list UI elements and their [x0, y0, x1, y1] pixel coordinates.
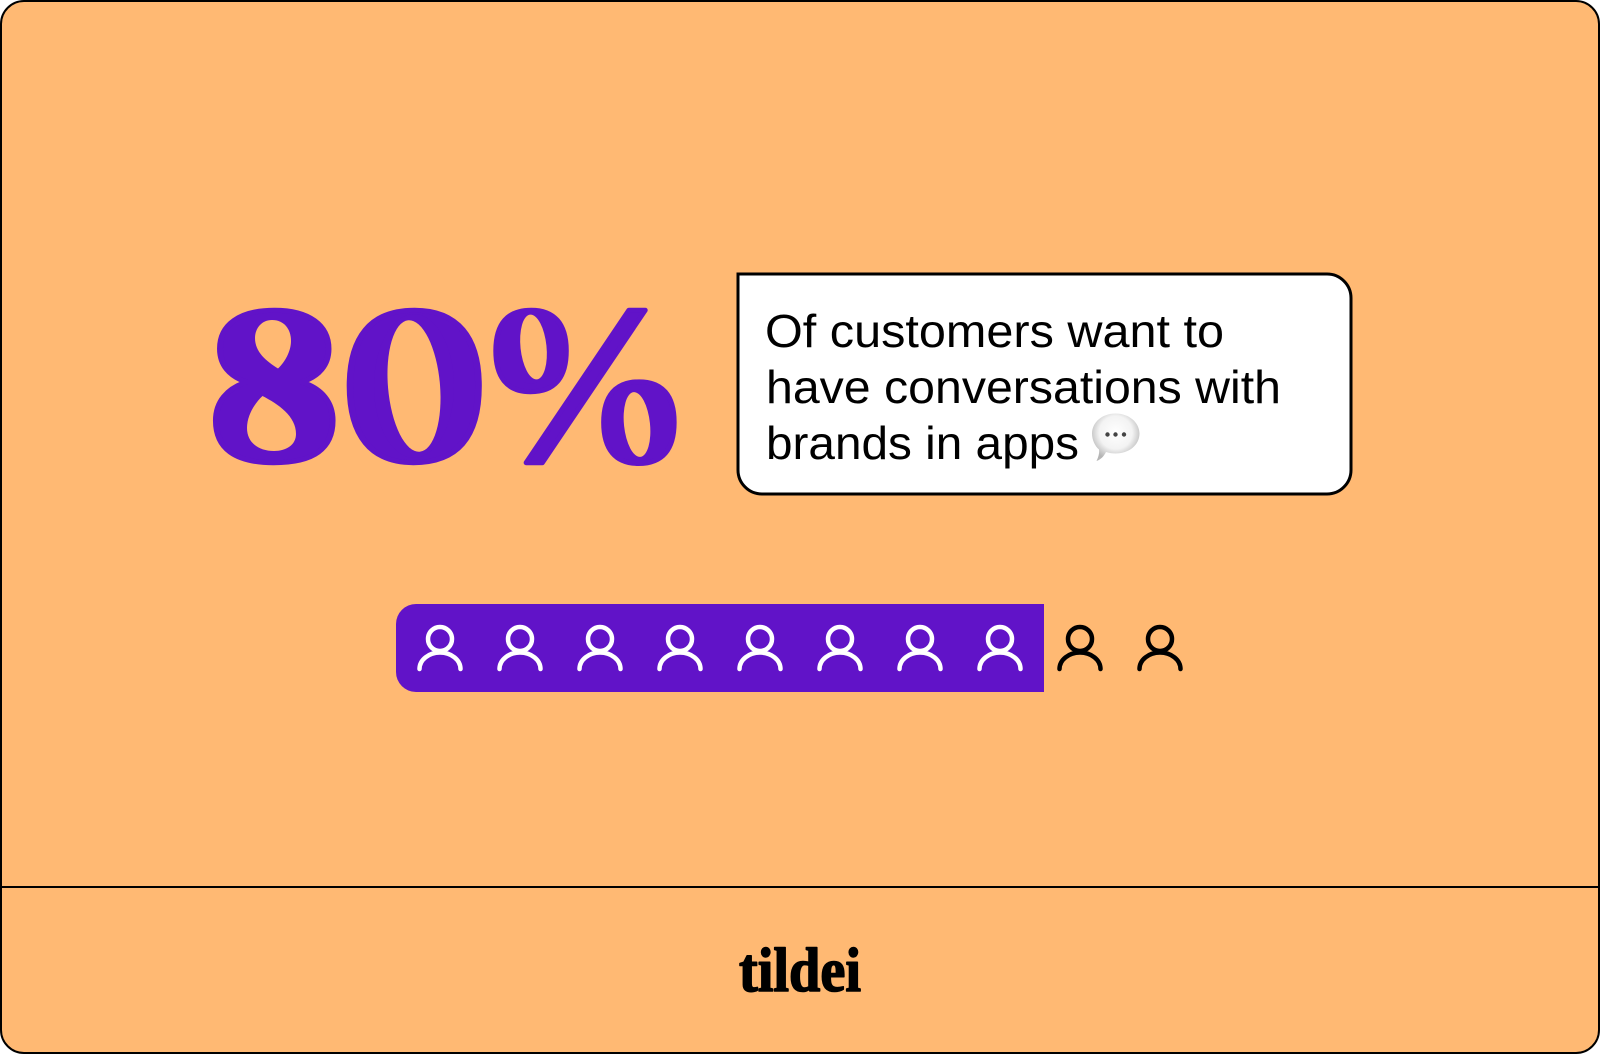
- callout: statistic description: [738, 274, 1351, 494]
- icon: speech balloon: [1092, 414, 1140, 461]
- white person icons: [420, 627, 1020, 669]
- callout text: brands in apps: [766, 417, 1079, 469]
- headline statistic: 80%: %: [473, 260, 695, 510]
- pictogram: 8 of 10 people: [396, 604, 1180, 692]
- callout text: [765, 305, 1281, 469]
- headline statistic: 80%: 0: [338, 260, 490, 510]
- callout box: [738, 274, 1351, 494]
- logo: tildei: tildei: [739, 937, 861, 1005]
- black person icons: [1060, 627, 1180, 669]
- headline statistic: 80%: 8: [207, 260, 342, 510]
- highlight bar: [396, 604, 1044, 692]
- headline statistic: 80%: [207, 260, 695, 510]
- callout text: Of customers want to: [765, 305, 1224, 357]
- callout text: have conversations with: [766, 361, 1281, 413]
